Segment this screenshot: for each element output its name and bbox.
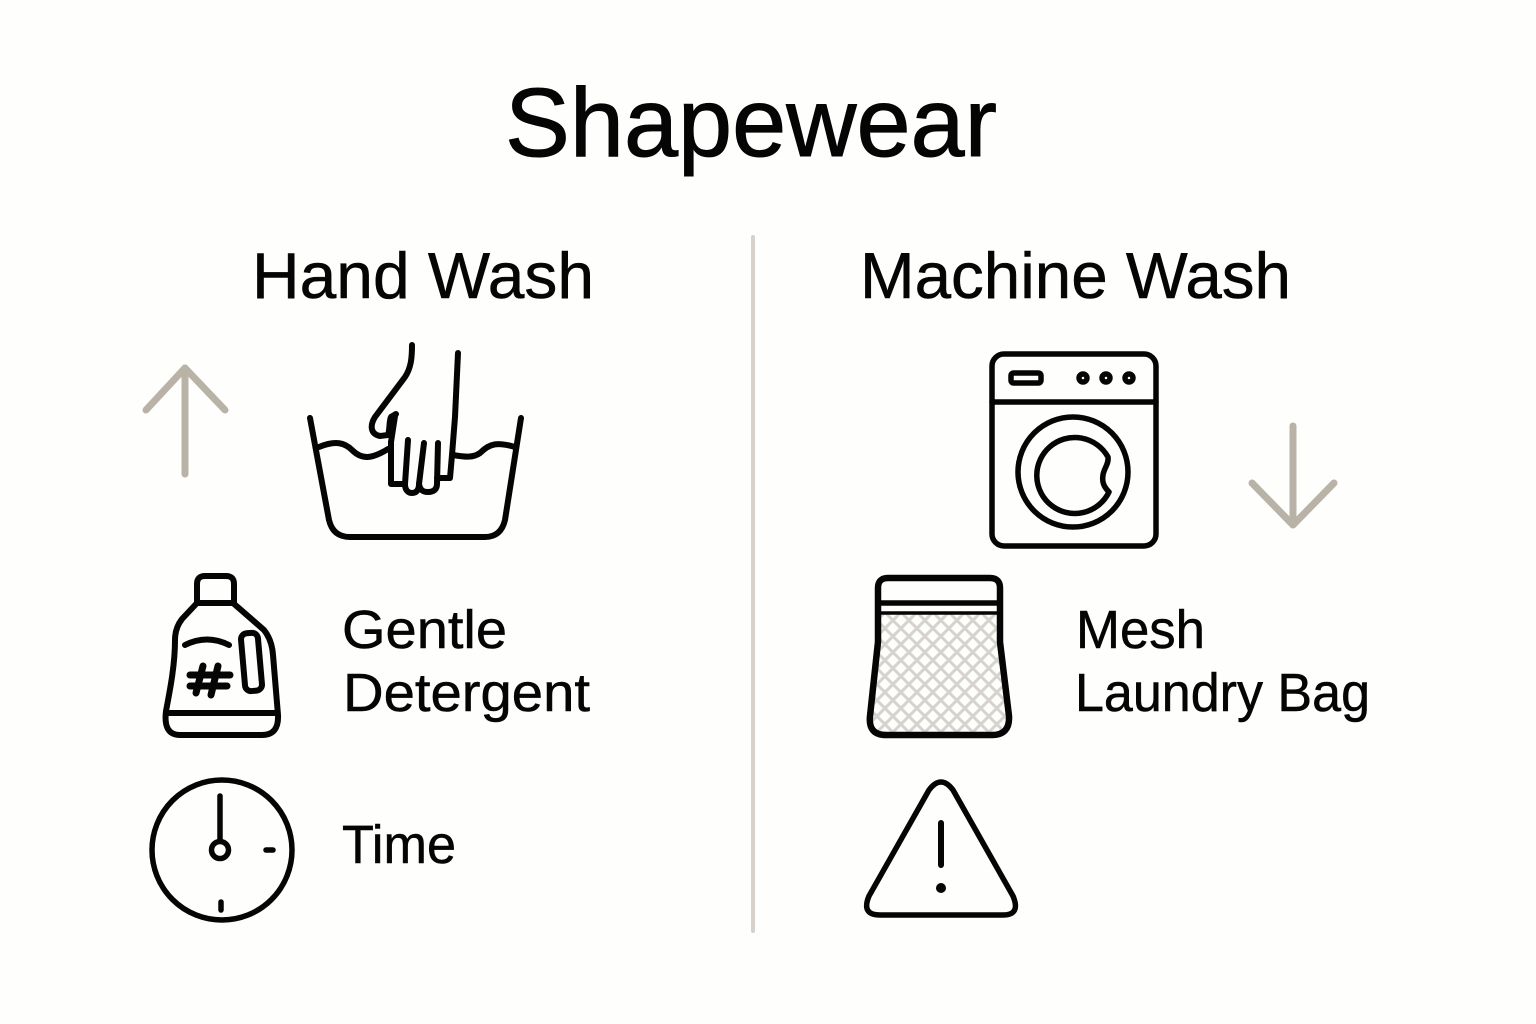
panel: hand wash xyxy=(146,239,594,920)
label: mesh laundry bag: Mesh xyxy=(1076,600,1205,660)
icon: mesh laundry bag xyxy=(870,578,1009,735)
heading: hand wash: Hand Wash xyxy=(252,239,594,312)
icon: washing machine xyxy=(992,354,1156,546)
icon: warning triangle xyxy=(867,782,1015,915)
icon: hand in wash basin xyxy=(310,345,521,537)
heading: machine wash: Machine Wash xyxy=(860,239,1291,312)
icon: detergent bottle xyxy=(166,576,278,735)
label: mesh laundry bag: Laundry Bag xyxy=(1075,663,1370,723)
label: gentle detergent: Detergent xyxy=(343,663,590,723)
title: Shapewear xyxy=(505,68,997,177)
label: gentle detergent xyxy=(342,600,590,723)
label: gentle detergent: Gentle xyxy=(342,600,507,660)
arrow: up xyxy=(146,368,225,474)
icon: clock xyxy=(152,780,292,920)
label: mesh laundry bag xyxy=(1075,600,1370,723)
label: time: Time xyxy=(342,815,456,875)
arrow: down xyxy=(1252,426,1334,525)
panel: machine wash xyxy=(860,239,1370,915)
